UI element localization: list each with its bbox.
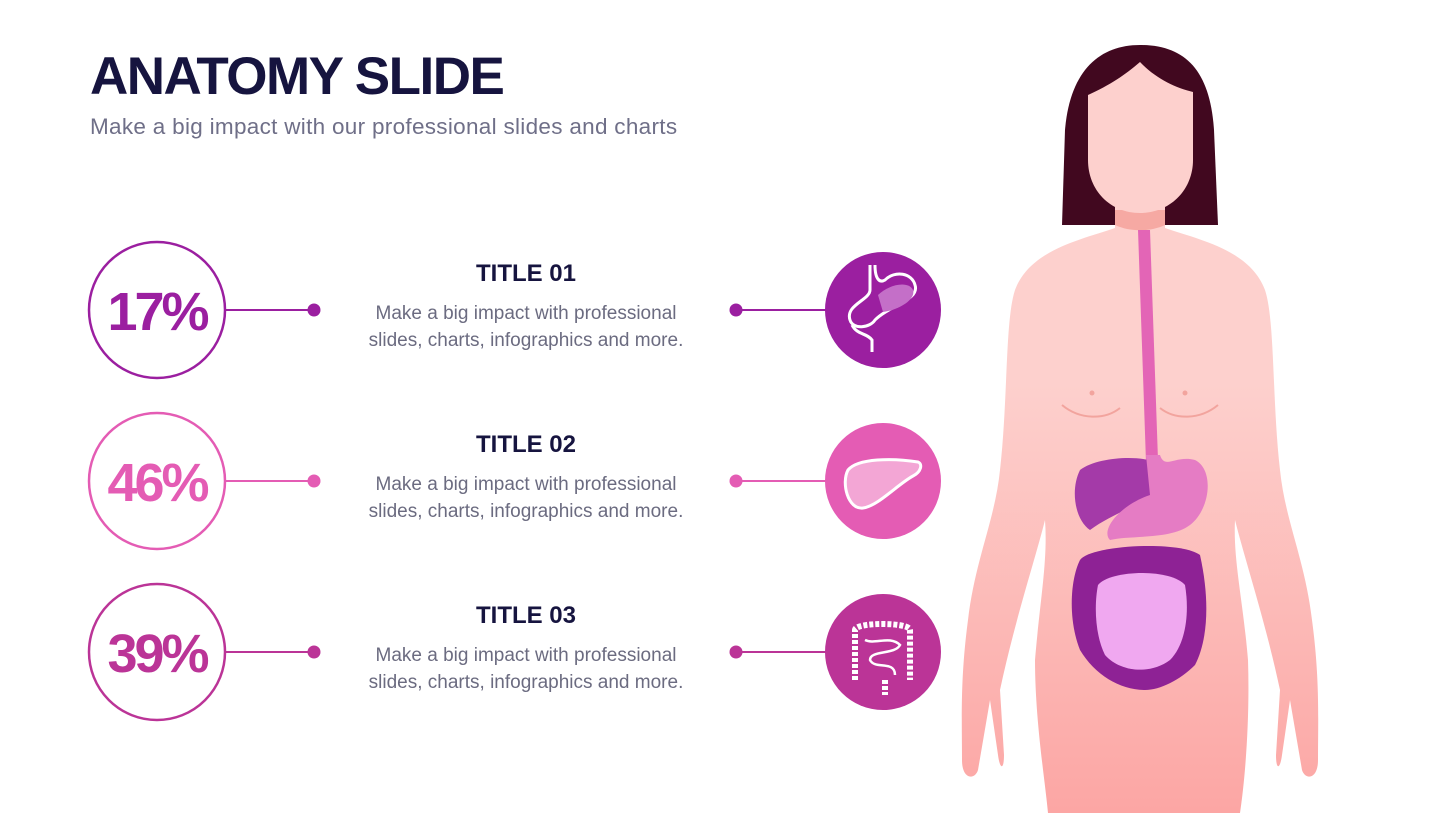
text block 3: Make a big impact with professional — [376, 645, 676, 666]
text block 1 — [369, 260, 683, 351]
text block 2: Make a big impact with professional — [376, 474, 676, 495]
subtitle: Make a big impact with our professional slides and charts — [90, 114, 677, 139]
rows graphics — [88, 240, 941, 722]
text block 3 — [369, 602, 683, 693]
row 1 graphics — [89, 242, 941, 378]
large intestine — [1072, 546, 1206, 690]
esophagus — [1138, 230, 1158, 462]
row 3 graphics — [89, 584, 941, 720]
text block 1: slides, charts, infographics and more. — [369, 330, 683, 351]
small intestine — [1096, 573, 1187, 670]
row 1 graphics: 17% — [107, 282, 209, 342]
neck collar — [1115, 210, 1165, 230]
stomach — [1107, 455, 1208, 540]
text block 3: TITLE 03 — [476, 602, 576, 629]
text block 1: Make a big impact with professional — [376, 303, 676, 324]
title: ANATOMY SLIDE — [90, 47, 503, 106]
text block 3: slides, charts, infographics and more. — [369, 672, 683, 693]
chest lines — [1062, 405, 1218, 417]
hair — [1062, 45, 1218, 225]
text block 2: TITLE 02 — [476, 431, 576, 458]
text block 1: TITLE 01 — [476, 260, 576, 287]
row 2 graphics — [89, 413, 941, 549]
text block 2: slides, charts, infographics and more. — [369, 501, 683, 522]
liver — [1075, 458, 1160, 530]
human figure — [962, 45, 1318, 813]
body — [962, 200, 1318, 813]
face — [1088, 62, 1193, 213]
row 3 graphics: 39% — [107, 624, 209, 684]
row 2 graphics: 46% — [107, 453, 209, 513]
text block 2 — [369, 431, 683, 522]
